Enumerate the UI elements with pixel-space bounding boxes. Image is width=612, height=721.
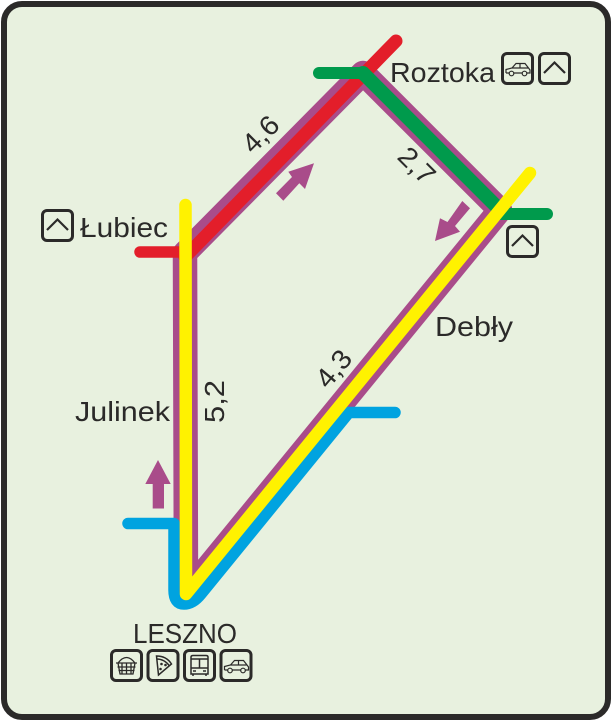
icon: basket <box>112 650 142 680</box>
arrow: towards Leszno <box>435 201 470 241</box>
arrow: towards Roztoka <box>276 163 314 201</box>
yellow line <box>186 173 530 594</box>
icon: car at Roztoka <box>502 54 532 84</box>
distance 5,2: 5,2 <box>199 380 230 423</box>
icon: pizza <box>148 650 178 680</box>
icon: bus <box>184 650 214 680</box>
label: Łubiec: Łubiec <box>80 212 168 243</box>
icon: roof at Łubiec <box>42 210 72 240</box>
blue line <box>128 412 395 604</box>
label: Julinek: Julinek <box>75 396 170 427</box>
label: LESZNO: LESZNO <box>133 618 237 649</box>
red line <box>140 41 396 257</box>
arrow: up along Julinek <box>145 460 171 508</box>
distance 4,3: 4,3 <box>309 343 358 394</box>
icon: roof at Debły <box>508 226 538 256</box>
label: Roztoka: Roztoka <box>390 57 496 88</box>
label: Debły: Debły <box>435 311 513 342</box>
purple route loop <box>185 73 500 594</box>
icon: roof at Roztoka <box>540 54 570 84</box>
green line <box>319 73 547 214</box>
distance 4,6: 4,6 <box>235 109 286 159</box>
distance 2,7: 2,7 <box>392 140 442 191</box>
icon: car at Leszno <box>221 650 251 680</box>
